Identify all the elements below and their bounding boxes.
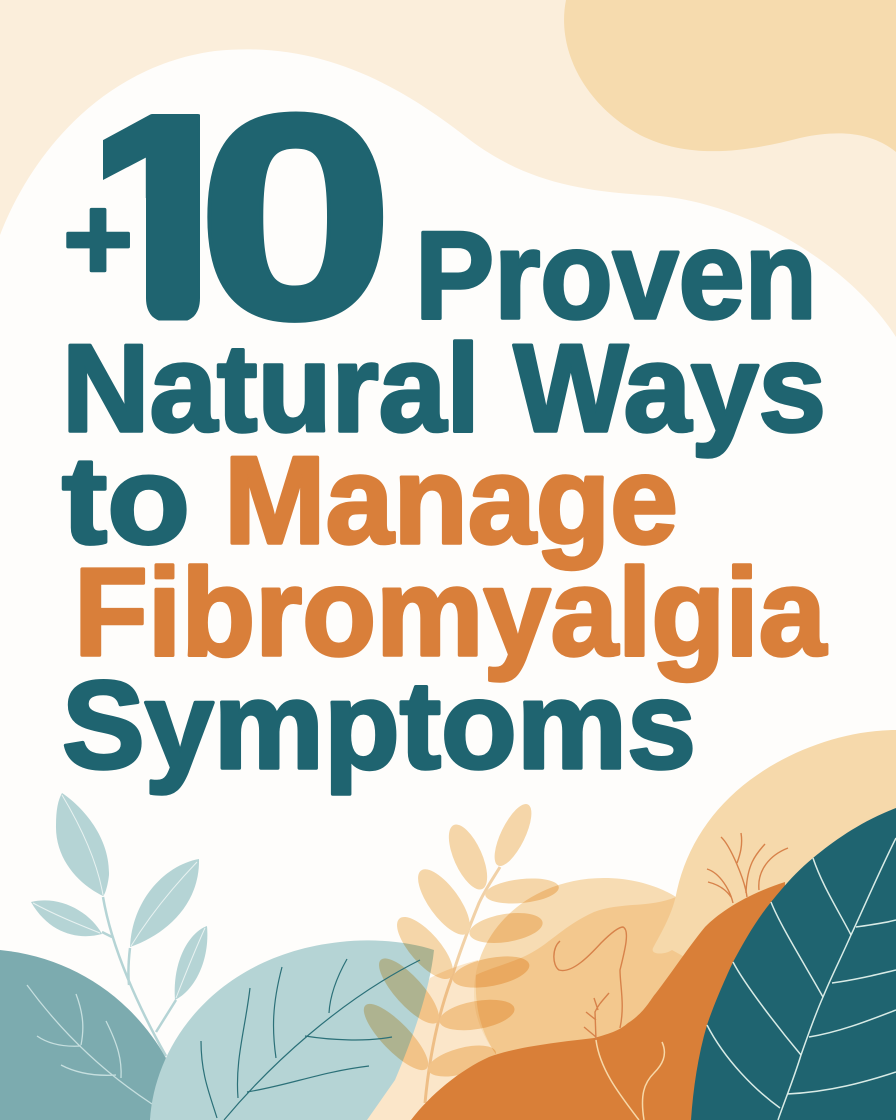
icon: teal hill veins	[27, 985, 152, 1104]
shape: darker peach inner	[476, 897, 690, 1060]
title: Natural Ways: Natural Ways	[62, 320, 826, 458]
background: peach top	[0, 0, 896, 400]
title: digit 1: 1	[69, 55, 262, 379]
fern leaves	[487, 799, 539, 871]
icon: peach fern branch	[355, 799, 560, 1103]
icon: dark leaf veins	[707, 838, 896, 1120]
title	[62, 55, 827, 795]
shape: burnt orange hill	[411, 882, 785, 1120]
icon: orange twigs and squiggle	[554, 833, 788, 1040]
shape: pale teal big leaf	[150, 940, 434, 1120]
sprig stem	[102, 897, 176, 1056]
title: plus sign: +	[63, 172, 133, 306]
title: Symptoms: Symptoms	[62, 657, 696, 795]
title: to: to	[62, 432, 190, 570]
blob: top-right sand	[564, 0, 896, 152]
title: Proven: Proven	[415, 207, 817, 345]
sprig leaf midribs	[33, 795, 205, 998]
title: Fibromyalgia: Fibromyalgia	[74, 544, 827, 682]
sprig leaves	[56, 793, 109, 896]
shape: peach circle	[474, 878, 690, 1060]
shape: pale peach band	[360, 960, 510, 1120]
title: digit 0: 0	[197, 55, 394, 379]
icon: big leaf veins	[201, 959, 420, 1120]
shape: teal dark hill left	[0, 950, 166, 1120]
title: Manage: Manage	[224, 432, 678, 570]
shape: dark teal leaf	[691, 808, 896, 1120]
shape: sand hill right	[653, 730, 896, 960]
fern stem	[425, 867, 500, 1103]
icon: cream stems on orange	[596, 1040, 664, 1120]
icon: pale teal leaf sprig	[31, 793, 207, 1056]
